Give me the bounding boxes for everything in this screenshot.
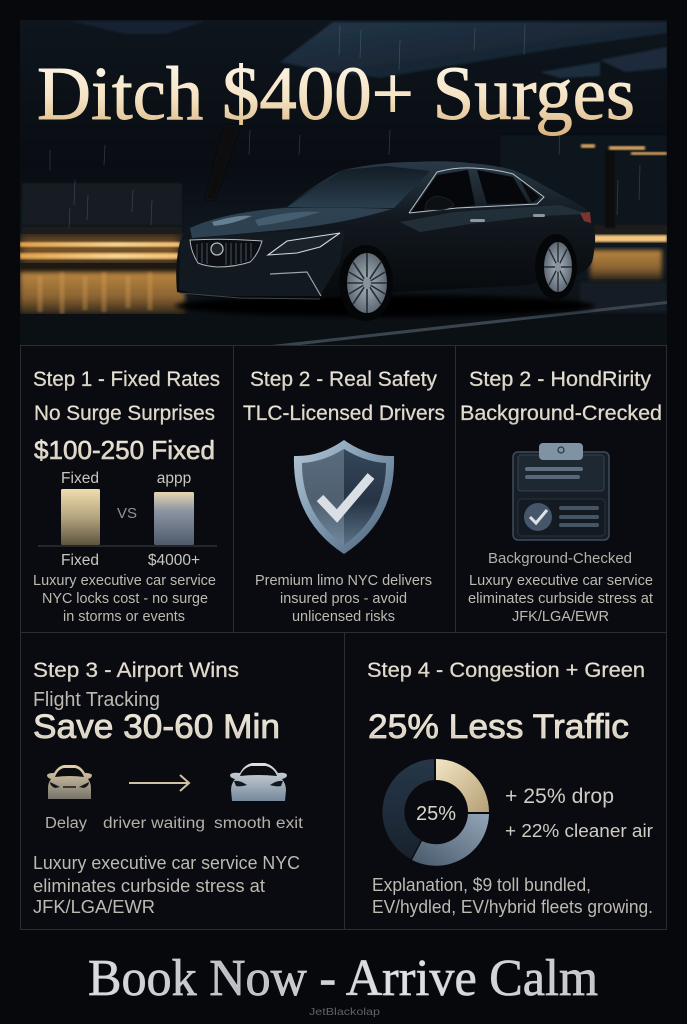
step 2 description: Premium limo NYC delivers bbox=[255, 572, 432, 589]
bar chart: fixed vs app: Fixed bbox=[61, 552, 99, 569]
step 1 heading: Step 1 - Fixed Rates bbox=[33, 368, 220, 391]
lower vent bbox=[270, 272, 321, 296]
journey labels: smooth exit bbox=[214, 815, 304, 832]
step 2 subheading: TLC-Licensed Drivers bbox=[243, 402, 445, 425]
call to action: Book Now - Arrive Calm bbox=[88, 950, 598, 1007]
step 3 description bbox=[33, 853, 300, 917]
bar chart: fixed vs app bbox=[38, 470, 217, 569]
bar chart: fixed vs app: appp bbox=[157, 470, 191, 487]
time saved: Save 30-60 Min bbox=[33, 708, 280, 746]
icon: clipboard with check bbox=[513, 443, 609, 540]
bar chart: fixed vs app: $4000+ bbox=[148, 552, 200, 569]
front fascia shading bbox=[179, 240, 342, 296]
panel: step 3 airport wins bbox=[20, 632, 344, 930]
donut chart bbox=[382, 759, 489, 866]
journey labels: Delay bbox=[45, 815, 87, 832]
stat: cleaner air: + 22% cleaner air bbox=[505, 821, 653, 841]
price: $100-250 Fixed bbox=[34, 435, 215, 465]
brand mark: JetBlackolap bbox=[309, 1006, 380, 1018]
title: Ditch $400+ Surges bbox=[37, 52, 635, 136]
step 3 heading: Step 3 - Airport Wins bbox=[33, 659, 239, 682]
step 4 heading: Step 4 - Congestion + Green bbox=[367, 659, 645, 682]
car bbox=[175, 161, 595, 321]
stat: traffic drop: + 25% drop bbox=[505, 785, 614, 808]
door shoulder reflection bbox=[400, 205, 588, 232]
rear wheel bbox=[535, 234, 577, 300]
door handles bbox=[470, 219, 485, 222]
icon: delayed car bbox=[47, 765, 92, 799]
panel: step 2 real safety bbox=[234, 346, 456, 632]
step 3 description: JFK/LGA/EWR bbox=[33, 897, 155, 917]
step 3 description: Luxury executive car service NYC bbox=[33, 853, 300, 873]
step 4 description: EV/hydled, EV/hybrid fleets growing. bbox=[372, 897, 653, 917]
car shadow and reflection bbox=[175, 295, 595, 317]
arrow bbox=[129, 775, 189, 791]
step 2 heading: Step 2 - Real Safety bbox=[250, 368, 437, 391]
icon: shield with check bbox=[294, 440, 394, 554]
step 1 description: Luxury executive car service bbox=[33, 572, 216, 589]
orange light streaks bbox=[20, 144, 667, 263]
step 3 description: eliminates curbside stress at bbox=[33, 876, 265, 896]
icon: arriving car bbox=[230, 763, 287, 801]
step 4 description bbox=[372, 875, 653, 917]
journey labels bbox=[45, 815, 304, 832]
step 2 description bbox=[255, 572, 432, 625]
step 1 description: in storms or events bbox=[63, 608, 185, 625]
step 1 description bbox=[33, 572, 216, 625]
wet road reflections bbox=[20, 250, 667, 345]
panel 3 description bbox=[468, 572, 654, 625]
hero panel: black sedan in the rain bbox=[20, 20, 667, 345]
donut chart: 25% bbox=[416, 803, 456, 825]
step 2 description: insured pros - avoid bbox=[280, 590, 407, 607]
rain bbox=[50, 25, 640, 228]
emblem bbox=[211, 243, 223, 255]
panel 3 description: Luxury executive car service bbox=[469, 572, 653, 589]
traffic reduction: 25% Less Traffic bbox=[368, 708, 629, 746]
bar chart: fixed vs app: Fixed bbox=[61, 470, 99, 487]
panel: step 4 congestion and green bbox=[344, 632, 666, 930]
panel 3 heading: Step 2 - HondRirity bbox=[469, 368, 652, 391]
panel: step 2 background checks bbox=[456, 346, 666, 632]
background-checked label: Background-Checked bbox=[488, 550, 632, 567]
headlight bbox=[268, 233, 340, 255]
step 1 description: NYC locks cost - no surge bbox=[42, 590, 208, 607]
side windows bbox=[411, 170, 475, 213]
panel 3 subheading: Background-Crecked bbox=[460, 402, 662, 425]
journey labels: driver waiting bbox=[103, 815, 205, 832]
panel 3 description: eliminates curbside stress at bbox=[468, 590, 654, 607]
step 3 subheading: Flight Tracking bbox=[33, 689, 160, 711]
step 2 description: unlicensed risks bbox=[292, 608, 395, 625]
hood highlights bbox=[190, 208, 392, 238]
windshield bbox=[287, 166, 430, 208]
front wheel bbox=[339, 245, 393, 321]
grille bbox=[190, 239, 262, 267]
step 4 description: Explanation, $9 toll bundled, bbox=[372, 875, 591, 895]
step 1 subheading: No Surge Surprises bbox=[34, 402, 215, 425]
mirror bbox=[425, 196, 454, 210]
bar chart: fixed vs app: VS bbox=[117, 505, 137, 522]
tail light bbox=[580, 212, 591, 223]
panel: step 1 fixed rates bbox=[20, 346, 234, 632]
panel 3 description: JFK/LGA/EWR bbox=[512, 608, 609, 625]
car body bbox=[176, 161, 595, 299]
window chrome bbox=[409, 168, 544, 213]
terminal canopy and sky bbox=[22, 21, 667, 242]
